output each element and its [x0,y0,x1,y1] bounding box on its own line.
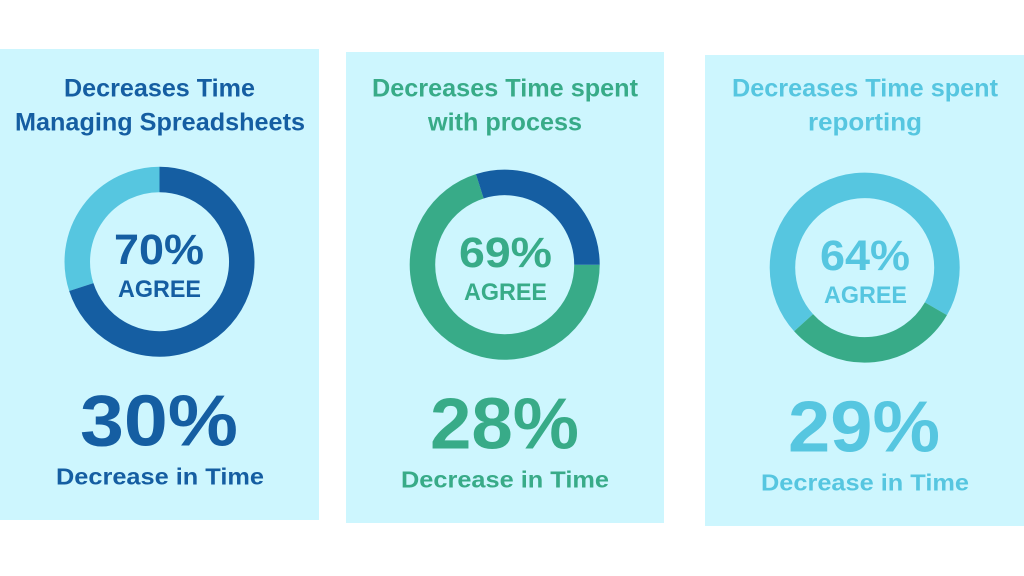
heading: process: Decreases Time spent [372,75,639,103]
heading: reporting [732,75,999,137]
donut label: 70% agree: 70% [114,226,204,274]
stat: 28% decrease: Decrease in Time [401,466,609,492]
heading: spreadsheets: Decreases Time [64,75,255,103]
heading: reporting: reporting [808,109,922,137]
donut label: 64% agree [820,232,910,309]
heading: reporting: Decreases Time spent [732,75,999,103]
donut chart: 70% [77,179,242,344]
stat: 29% decrease [761,388,969,496]
donut label: 64% agree: 64% [820,232,910,280]
stat: 28% decrease: 28% [430,384,579,464]
panel: process [346,52,664,523]
donut label: 69% agree: 69% [459,229,552,277]
donut label: 64% agree: AGREE [824,282,907,309]
stat: 30% decrease: 30% [80,382,238,462]
donut chart: 69% [422,182,587,347]
heading: spreadsheets: Managing Spreadsheets [15,109,305,137]
donut label: 70% agree [114,226,204,303]
donut chart: 64% [782,185,947,350]
stat: 29% decrease: Decrease in Time [761,470,969,496]
panel: spreadsheets [0,49,319,520]
heading: process: with process [427,109,582,137]
heading: process [372,75,639,137]
donut label: 70% agree: AGREE [118,276,201,303]
stat: 30% decrease: Decrease in Time [56,464,264,490]
donut label: 69% agree: AGREE [464,279,547,306]
panel: reporting [705,55,1024,526]
stat: 30% decrease [56,382,264,490]
stat: 29% decrease: 29% [788,388,940,468]
stat: 28% decrease [401,384,609,492]
donut label: 69% agree [459,229,552,306]
heading: spreadsheets [15,75,305,137]
